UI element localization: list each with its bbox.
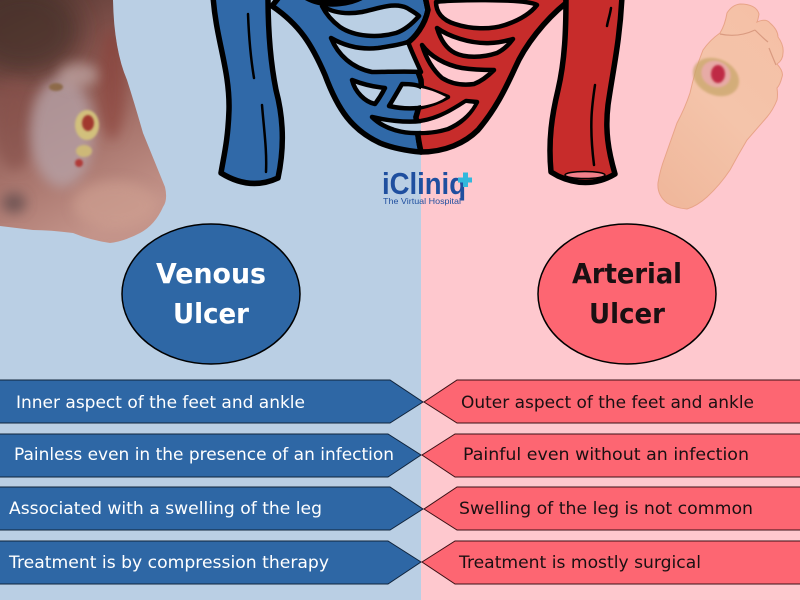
arterial row 2: Painful even without an infection — [463, 445, 749, 464]
arterial row 1: Outer aspect of the feet and ankle — [461, 393, 754, 412]
venous row 2 — [0, 434, 421, 477]
vein vessel — [213, 0, 282, 183]
photo: arterial ulcer on foot — [658, 4, 783, 209]
arterial row 4 — [422, 541, 800, 584]
illustration: blood vessels — [213, 0, 622, 183]
vein capillaries — [272, 0, 428, 152]
heading: Arterial Ulcer: Arterial — [572, 257, 682, 290]
logo: iCliniq: iCliniq — [382, 166, 466, 201]
capillary gaps — [300, 0, 537, 133]
venous row 2: Painless even in the presence of an infection — [14, 445, 394, 464]
venous row 1 — [0, 380, 423, 423]
arterial row 4: Treatment is mostly surgical — [458, 553, 701, 572]
arterial row 2 — [422, 434, 800, 477]
arterial row 3 — [424, 487, 800, 530]
heading: Venous Ulcer: Venous — [156, 257, 266, 290]
background: venous side — [0, 0, 421, 600]
venous row 4: Treatment is by compression therapy — [8, 553, 329, 572]
venous row 1: Inner aspect of the feet and ankle — [16, 393, 305, 412]
venous row 3: Associated with a swelling of the leg — [9, 499, 322, 518]
venous row 4 — [0, 541, 421, 584]
artery capillaries — [406, 0, 566, 152]
logo: iCliniq: The Virtual Hospital — [383, 196, 461, 206]
heading: Arterial Ulcer — [538, 224, 716, 364]
heading: Venous Ulcer — [122, 224, 300, 364]
arterial row 3: Swelling of the leg is not common — [459, 499, 753, 518]
heading: Arterial Ulcer: Ulcer — [589, 297, 665, 330]
photo: venous ulcer on ankle — [0, 0, 175, 250]
heading: Venous Ulcer: Ulcer — [173, 297, 249, 330]
arterial row 1 — [424, 380, 800, 423]
background: arterial side — [421, 0, 800, 600]
artery vessel — [550, 0, 622, 183]
vessel openings and highlights — [565, 172, 605, 178]
venous row 3 — [0, 487, 423, 530]
logo plus sign — [458, 172, 472, 187]
